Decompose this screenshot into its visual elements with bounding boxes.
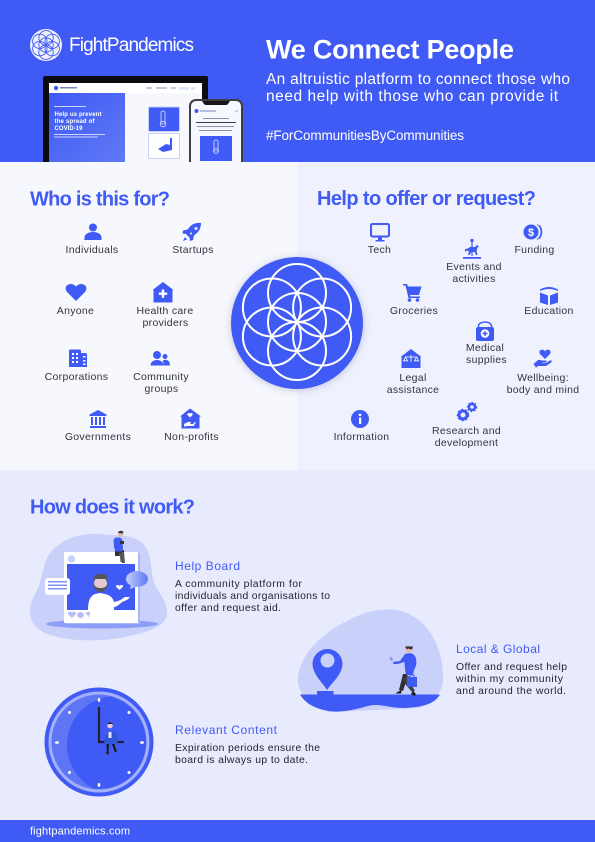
footer [0, 820, 595, 842]
heading: who is this for: Who is this for? [30, 188, 170, 210]
text: local and global: and around the world. [456, 686, 566, 697]
central logo circle [231, 257, 363, 389]
hashtag: #ForCommunitiesByCommunities [266, 128, 464, 143]
item: education [524, 287, 574, 317]
item: legal assistance [387, 349, 439, 396]
item: non-profits [164, 408, 219, 443]
item: wellbeing: Wellbeing: [517, 372, 569, 384]
item: medical supplies [466, 322, 507, 366]
item: events and activities: Events and [446, 261, 502, 273]
item: research and development: development [435, 437, 498, 449]
item: research and development: Research and [432, 425, 501, 437]
item: groceries: Groceries [390, 305, 438, 317]
item: community groups [133, 351, 189, 395]
text: local and global [455, 642, 567, 697]
laptop mockup: Help us prevent [54, 112, 102, 118]
item: governments: Governments [65, 431, 131, 443]
item: community groups: groups [145, 383, 178, 395]
item: medical supplies: supplies [466, 354, 507, 366]
item: corporations [45, 350, 108, 383]
laptop mockup: the spread of [54, 119, 96, 125]
laptop mockup: COVID-19 [54, 126, 83, 132]
laptop mockup [43, 76, 208, 162]
panel: how does it work [0, 470, 595, 820]
item: events and activities [446, 239, 502, 285]
text: relevant content: board is always up to date. [175, 755, 308, 766]
item: medical supplies: Medical [466, 342, 504, 354]
illustration: clock [44, 688, 165, 796]
walking person [389, 646, 417, 696]
item: information: Information [334, 431, 389, 443]
item: health care providers: providers [143, 317, 188, 329]
text: help board: A community platform for [175, 579, 303, 590]
illustration: local and global [298, 609, 443, 712]
item: individuals [66, 224, 118, 256]
item: non-profits: Non-profits [164, 431, 219, 443]
text: relevant content: Relevant Content [175, 723, 278, 737]
footer: fightpandemics.com [30, 826, 130, 838]
subtitle: An altruistic platform to connect those who [266, 71, 570, 88]
item: anyone [57, 284, 94, 317]
text: relevant content: Expiration periods ensure the [175, 743, 320, 754]
text: relevant content [175, 723, 320, 766]
item: individuals: Individuals [66, 244, 118, 256]
text: help board: Help Board [175, 559, 240, 573]
item: tech [368, 224, 391, 256]
logo: FightPandemics: FightPandemics [69, 35, 194, 56]
illustration: help board [30, 531, 167, 640]
text: help board [175, 559, 330, 614]
subtitle: need help with those who can provide it [266, 88, 559, 105]
panel: who is this for [0, 162, 297, 470]
heading: how does it work: How does it work? [30, 496, 195, 518]
text: help board: offer and request aid. [175, 603, 281, 614]
person on hands [104, 723, 118, 754]
item: funding: Funding [514, 244, 555, 256]
panel: header [0, 0, 595, 179]
item: community groups: Community [133, 371, 189, 383]
text: help board: individuals and organisations to [175, 591, 330, 602]
subtitle [266, 71, 570, 105]
item: governments [65, 410, 131, 443]
heading: help to offer or request: Help to offer or request? [317, 188, 536, 210]
phone mockup [189, 99, 243, 162]
item: events and activities: activities [452, 273, 496, 285]
item: startups: Startups [172, 244, 214, 256]
item: education: Education [524, 305, 574, 317]
item: startups [172, 223, 214, 256]
text: local and global: within my community [455, 674, 564, 685]
text: local and global: Offer and request help [456, 662, 567, 673]
item: funding [514, 224, 555, 256]
person on frame [114, 531, 125, 563]
panel: help to offer or request [297, 162, 595, 470]
item: wellbeing [507, 350, 579, 396]
item: groceries [390, 284, 438, 317]
item: legal assistance: assistance [387, 384, 439, 396]
item: legal assistance: Legal [399, 372, 427, 384]
item: wellbeing: body and mind [507, 384, 579, 396]
item: research and development [432, 402, 501, 449]
item: funding: $ [528, 227, 534, 239]
item: anyone: Anyone [57, 305, 94, 317]
item: tech: Tech [368, 244, 391, 256]
item: health care providers: Health care [136, 305, 194, 317]
item: health care providers [136, 282, 194, 329]
title: We Connect People [266, 34, 514, 64]
item: corporations: Corporations [45, 371, 108, 383]
text: local and global: Local & Global [456, 642, 540, 656]
item: information [334, 410, 389, 443]
logo: FightPandemics [30, 29, 194, 61]
